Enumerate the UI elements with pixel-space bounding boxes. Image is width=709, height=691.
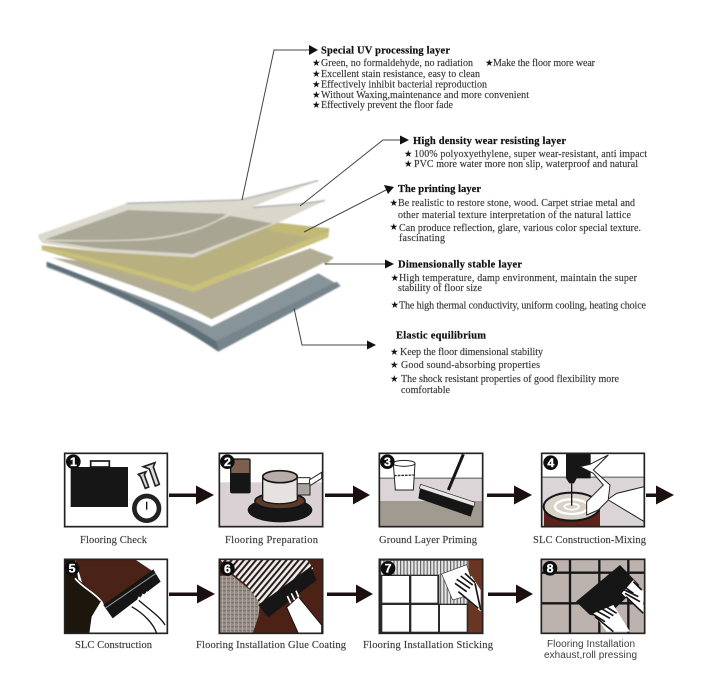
text block: special UV processing layer: Special UV processing layer [321,46,450,56]
step 3 icon: ground layer priming [379,453,483,527]
text block: special UV processing layer: ★ [485,58,494,69]
step labels: SLC Construction-Mixing [533,535,647,546]
arrow [169,486,214,504]
text block: dimensionally stable layer: The high thermal conductivity, uniform cooling, heating choice [399,300,647,312]
arrow [488,584,533,604]
text block: the printing layer: fascinating [399,233,445,244]
text block: special UV processing layer: Effectively inhibit bacterial reproduction [321,80,487,90]
text block: the printing layer: Be realistic to restore stone, wood. Carpet striae metal and [398,198,635,209]
step labels: exhaust,roll pressing [544,650,637,661]
text block: elastic equilibrium: Keep the floor dimensional stability [400,347,543,358]
step 7 icon: flooring installation sticking [379,559,483,633]
leader: printing layer [304,185,394,232]
step labels: Flooring Installation [547,639,635,650]
leader: elastic equilibrium [294,308,376,350]
step labels: Flooring Installation Sticking [363,640,494,651]
text block: high density wear resisting layer: 100% polyoxyethylene, super wear-resistant, anti impact [414,149,647,160]
text block: high density wear resisting layer: PVC more water more non slip, waterproof and natural [414,159,638,170]
text block: special UV processing layer: ★ [312,69,321,80]
text block: dimensionally stable layer: ★ [390,273,399,284]
text block: special UV processing layer: ★ [312,90,321,101]
text block: elastic equilibrium: ★ [390,374,399,385]
text block: special UV processing layer: Effectively prevent the floor fade [321,100,454,111]
text block: dimensionally stable layer: High temperature, damp environment, maintain the super [399,273,638,284]
step labels: Flooring Preparation [225,535,319,546]
arrow [646,486,674,504]
text block: the printing layer: ★ [390,222,398,233]
text block: dimensionally stable layer: Dimensionally stable layer [398,260,522,270]
layer: UV processing [37,181,325,241]
step 2 icon: flooring preparation: 2 [224,455,231,469]
text block: elastic equilibrium: ★ [390,347,399,358]
step 4 icon: SLC construction mixing [542,453,644,528]
step 6 icon: flooring installation glue coating: 6 [224,562,231,576]
text block: dimensionally stable layer: stability of floor size [398,283,483,294]
text block: special UV processing layer: ★ [312,58,321,69]
text block: the printing layer: ★ [390,198,398,209]
step 5 icon: SLC construction: 5 [69,562,76,576]
text block: special UV processing layer: ★ [312,100,321,111]
text block: dimensionally stable layer [390,260,647,312]
step 6 icon: flooring installation glue coating [219,559,323,633]
text block: special UV processing layer: Without Waxing,maintenance and more convenient [321,90,529,101]
text block: elastic equilibrium: Elastic equilibrium [396,330,486,342]
step 5 icon: SLC construction [65,559,167,633]
layer: elastic equilibrium [47,262,341,352]
text block: special UV processing layer: Excellent stain resistance, easy to clean [321,69,480,80]
illustration: flooring layers [37,181,341,352]
leader: UV processing layer [242,45,318,200]
step labels [75,535,647,661]
arrow [325,486,370,504]
text block: special UV processing layer: ★ [312,80,321,90]
text block: the printing layer [390,184,641,244]
step labels: Ground Layer Priming [379,535,478,546]
layer: printing [42,223,329,292]
text block: elastic equilibrium: ★ [390,360,399,371]
text block: high density wear resisting layer: ★ [404,159,413,170]
text block: high density wear resisting layer: ★ [404,149,413,160]
step 8 icon: flooring installation exhaust, roll pressing: 8 [547,562,554,576]
step 2 icon: flooring preparation [219,453,323,527]
leader: dimensionally stable layer [325,260,394,268]
text block: the printing layer: The printing layer [398,184,481,195]
step 8 icon: flooring installation exhaust, roll pressing [541,559,645,633]
step labels: Flooring Installation Glue Coating [196,640,347,651]
arrow [487,486,532,504]
arrow [169,584,215,604]
step 1 icon: flooring check [65,453,167,527]
step labels: Flooring Check [80,535,148,546]
text block: elastic equilibrium: Good sound-absorbing properties [401,360,540,371]
layer: dimensionally stable [43,248,334,325]
text block: special UV processing layer: Make the floor more wear [493,58,596,69]
step 1 icon: flooring check: 1 [70,455,77,469]
text block: high density wear resisting layer: High density wear resisting layer [413,136,566,147]
text block: special UV processing layer: Green, no formaldehyde, no radiation [321,58,473,69]
text block: the printing layer: Can produce reflection, glare, various color special texture. [399,223,641,234]
step 4 icon: SLC construction mixing: 4 [547,456,554,470]
text block: high density wear resisting layer [404,136,647,170]
arrow [327,584,373,604]
layer: high density wear [38,201,325,257]
text block: dimensionally stable layer: ★ [390,300,399,311]
text block: elastic equilibrium [390,330,620,396]
text block: elastic equilibrium: comfortable [401,385,451,396]
leader: high density layer [300,136,409,206]
text block: elastic equilibrium: The shock resistant properties of good flexibility more [401,374,620,385]
step 7 icon: flooring installation sticking: 7 [385,562,392,576]
step 3 icon: ground layer priming: 3 [384,455,391,469]
step labels: SLC Construction [75,640,153,651]
text block: the printing layer: other material texture interpretation of the natural lattice [398,210,632,221]
text block: special UV processing layer [312,46,596,111]
